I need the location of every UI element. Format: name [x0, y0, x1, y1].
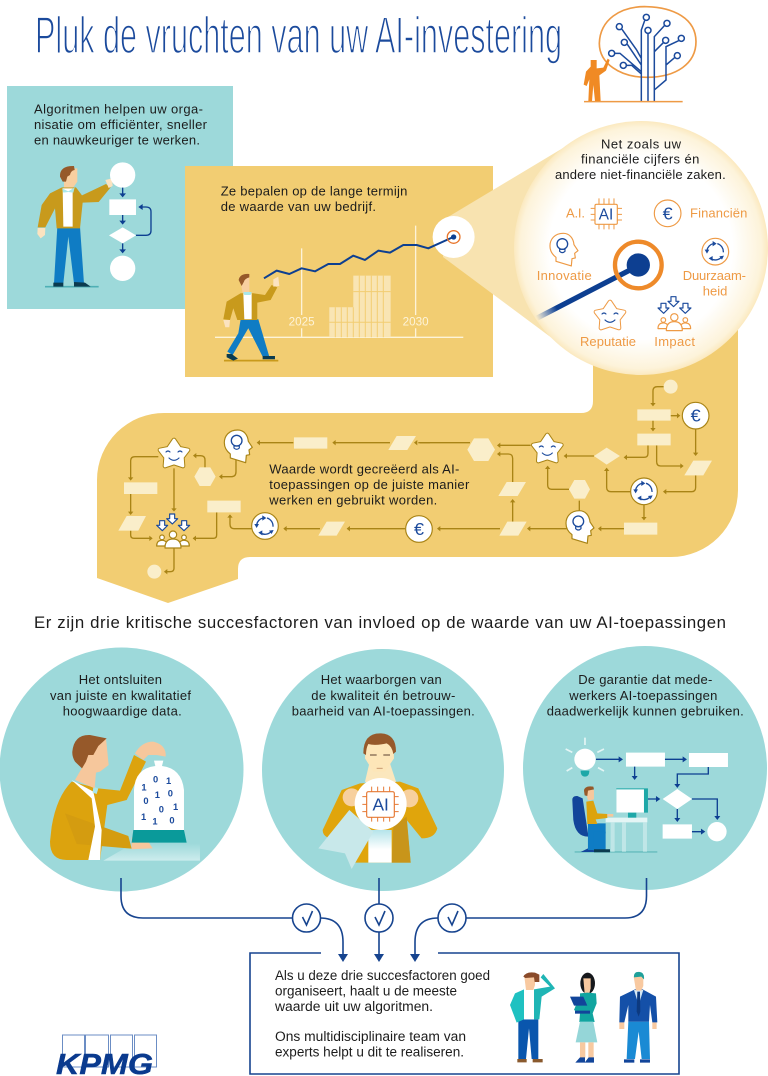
panel: algorithms	[7, 86, 233, 309]
chart: value over time	[215, 226, 463, 337]
icon labels: Duurzaam-	[683, 268, 746, 283]
text: magnifier intro: andere niet-financiële zaken.	[555, 167, 726, 182]
icon: check 3	[438, 904, 466, 932]
text: users: daadwerkelijk kunnen gebruiken.	[547, 703, 744, 718]
text: conclusion: Als u deze drie succesfactoren goed	[275, 968, 490, 983]
text: reliability: Het waarborgen van	[321, 672, 442, 687]
figure: man with data bell jar: 1	[173, 802, 178, 812]
figure: walking man	[223, 274, 279, 361]
text: algorithms	[34, 101, 208, 147]
text: conclusion: waarde uit uw algoritmen.	[274, 999, 433, 1014]
icon labels: A.I.	[566, 205, 585, 220]
chart: value over time: 2025	[289, 316, 315, 329]
panel: long-term value	[185, 148, 641, 377]
text: conclusion	[274, 968, 490, 1060]
zoom cone	[443, 148, 641, 359]
panel: reliability	[262, 649, 504, 891]
text: algorithms: nisatie om efficiënter, sneller	[34, 117, 208, 132]
text: algorithms: Algoritmen helpen uw orga-	[34, 101, 203, 116]
text: reliability: de kwaliteit én betrouw-	[311, 688, 455, 703]
text: magnifier intro: financiële cijfers én	[581, 152, 699, 167]
connectors	[121, 878, 646, 962]
figure: three team members	[510, 972, 657, 1063]
figure: man with data bell jar: 0	[168, 789, 173, 799]
logo: KPMG	[56, 1035, 156, 1076]
figure: man with data bell jar: 0	[169, 815, 175, 825]
text: value: toepassingen op de juiste manier	[269, 477, 470, 492]
flow left part: €	[414, 519, 424, 539]
icon: tree of circuits with person	[584, 7, 696, 102]
icon labels: Innovatie	[537, 268, 592, 283]
icon labels: heid	[703, 284, 727, 299]
flow right part: €	[691, 406, 701, 426]
figure: man with data bell jar	[50, 735, 200, 861]
text: long-term: Ze bepalen op de lange termijn	[221, 184, 407, 199]
text: users	[547, 672, 744, 718]
icon labels: Impact	[654, 334, 695, 349]
icons	[537, 198, 729, 331]
text: reliability	[292, 672, 475, 718]
icon labels	[537, 205, 747, 349]
icon labels: Reputatie	[580, 334, 636, 349]
icon: check 2	[365, 904, 393, 932]
figure: man with data bell jar: 1	[166, 776, 171, 786]
text: data: Het ontsluiten	[79, 672, 162, 687]
icons: €	[663, 203, 673, 223]
flow right part	[420, 380, 712, 543]
figure: man with data bell jar: 1	[141, 812, 146, 822]
text: data	[50, 672, 191, 718]
icons: AI	[599, 206, 613, 223]
text: conclusion: Ons multidisciplinaire team van	[275, 1029, 466, 1044]
figure: man at flowchart	[37, 162, 151, 287]
panel: conclusion	[250, 953, 679, 1074]
figure: worker at computer with flowchart	[566, 738, 728, 852]
panel: magnifier	[514, 121, 768, 375]
panel: data	[0, 648, 244, 892]
text: users: werkers AI-toepassingen	[568, 688, 717, 703]
chart: value over time: 2030	[403, 316, 429, 329]
figure: man with data bell jar: 1	[152, 816, 158, 826]
text: conclusion: experts helpt u dit te realiseren.	[275, 1045, 464, 1060]
text: value	[268, 461, 470, 507]
figure: man with data bell jar: 0	[159, 805, 164, 815]
figure: man with data bell jar: 0	[143, 796, 149, 806]
text: data: van juiste en kwalitatief	[50, 688, 191, 703]
text: data: hoogwaardige data.	[63, 703, 182, 718]
icon labels: Financiën	[690, 205, 747, 220]
text: long-term: de waarde van uw bedrijf.	[221, 199, 376, 214]
figure: man with AI rosette	[318, 733, 437, 869]
figure: man with data bell jar: 1	[141, 783, 147, 793]
text: algorithms: en nauwkeuriger te werken.	[34, 132, 200, 147]
figure: man with data bell jar: 0	[153, 775, 158, 785]
text: conclusion: organiseert, haalt u de meeste	[275, 984, 457, 999]
icon: check 1	[292, 904, 320, 932]
text: users: De garantie dat mede-	[578, 672, 712, 687]
text: long-term	[221, 184, 407, 214]
text: reliability: baarheid van AI-toepassingen.	[292, 703, 475, 718]
panel: flow area	[97, 330, 738, 603]
text: magnifier intro: Net zoals uw	[601, 136, 682, 151]
figure: man with data bell jar: 1	[155, 790, 160, 800]
panel: users	[523, 646, 767, 890]
heading: success factors: Er zijn drie kritische succesfactoren van invloed op de waarde van uw AI-toepassingen	[34, 613, 726, 632]
figure: man with AI rosette: AI	[372, 795, 389, 815]
value line	[264, 216, 475, 278]
flow left part	[118, 430, 432, 579]
text: value: werken en gebruikt worden.	[268, 492, 437, 507]
text: value: Waarde wordt gecreëerd als AI-	[269, 461, 459, 476]
text: magnifier intro	[555, 136, 726, 182]
